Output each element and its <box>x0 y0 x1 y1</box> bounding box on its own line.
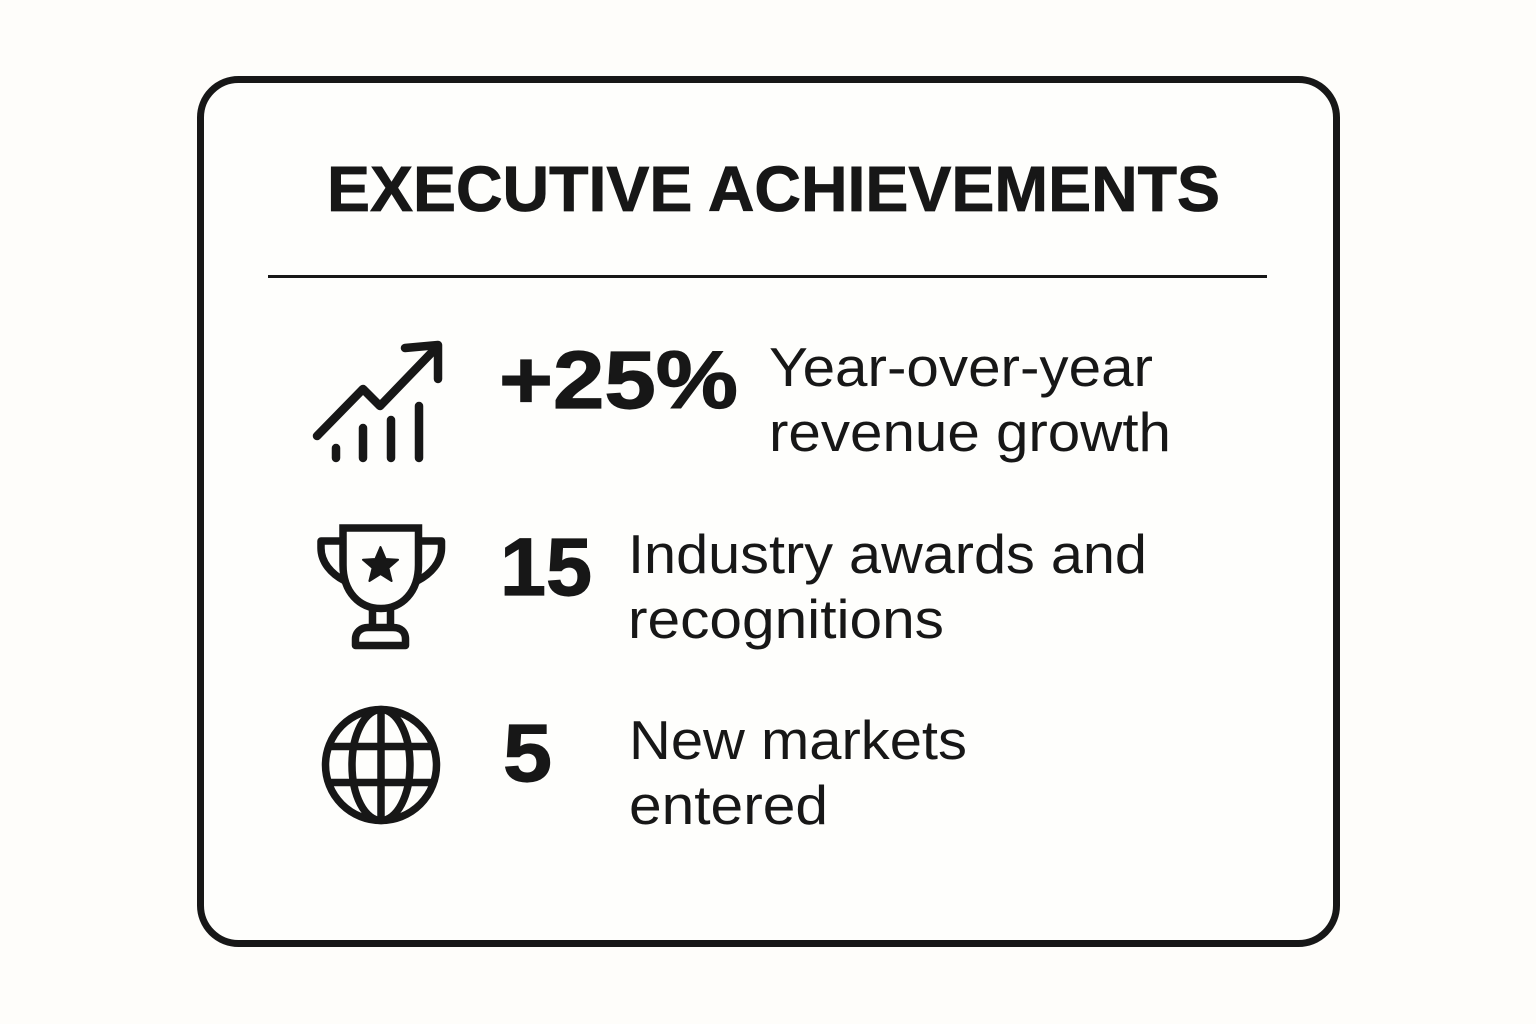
icon: growth chart with arrow <box>317 345 438 458</box>
panel: executive achievements card <box>200 80 1336 944</box>
label: industry awards and recognitions <box>628 523 1147 650</box>
stat: 5: 5 <box>503 708 552 799</box>
icon: globe <box>326 709 436 821</box>
label: industry awards and recognitions: Industry awards and <box>628 523 1147 585</box>
label: new markets entered <box>629 709 967 836</box>
row: new markets <box>326 708 967 836</box>
label: year-over-year revenue growth <box>769 336 1171 463</box>
title: EXECUTIVE ACHIEVEMENTS <box>327 153 1220 225</box>
label: year-over-year revenue growth: Year-over-year <box>769 336 1153 398</box>
row: industry awards <box>321 522 1147 650</box>
label: new markets entered: New markets <box>629 709 967 771</box>
icon: trophy with star <box>321 528 442 646</box>
label: new markets entered: entered <box>629 774 828 836</box>
row: revenue growth <box>317 335 1171 463</box>
label: year-over-year revenue growth: revenue growth <box>769 401 1171 463</box>
label: industry awards and recognitions: recognitions <box>628 588 944 650</box>
stat: +25%: +25% <box>499 335 738 426</box>
stat: 15: 15 <box>500 522 592 613</box>
